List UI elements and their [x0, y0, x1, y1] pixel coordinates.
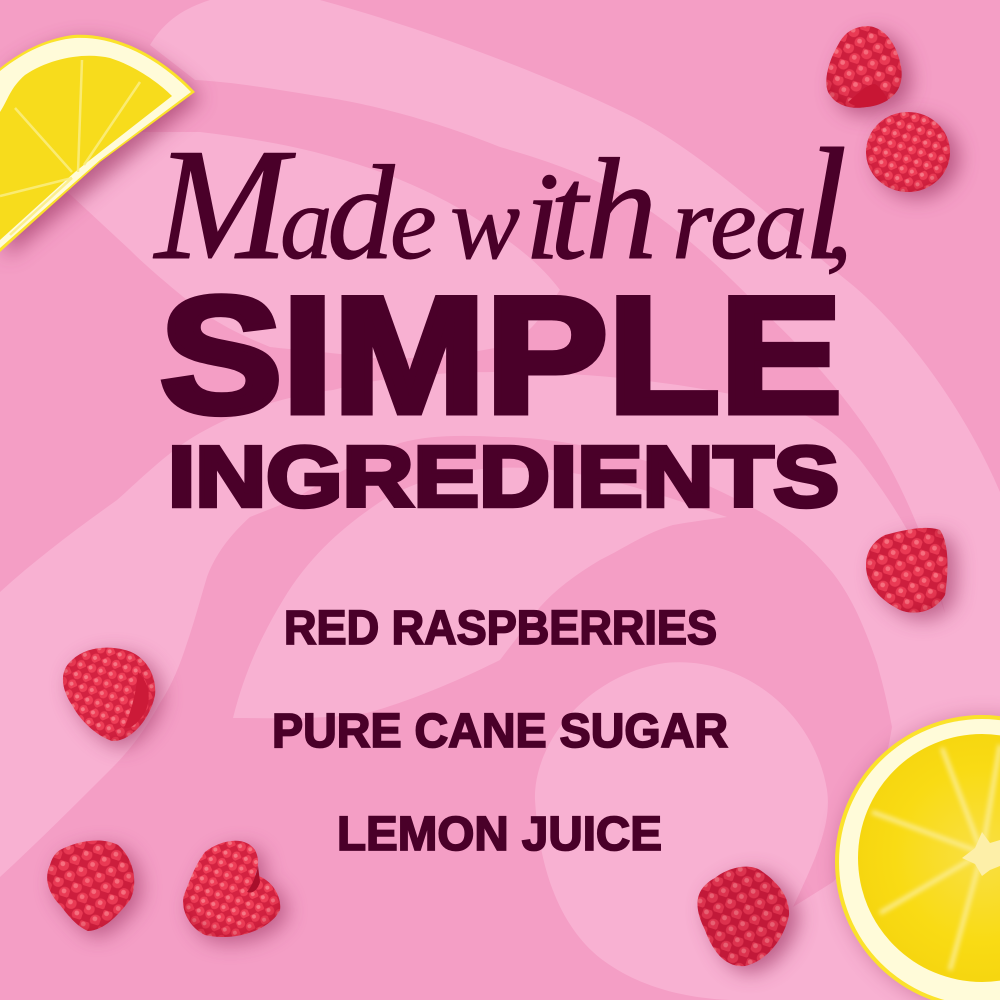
- swirl: inner leaf: [233, 468, 727, 718]
- heading: handwritten line: d: [327, 139, 395, 288]
- shading: raspberry 5: [47, 841, 134, 931]
- heading: handwritten line: r: [672, 164, 714, 281]
- rind: lemon slice: [835, 715, 1000, 1000]
- heading: handwritten line: ,: [826, 164, 852, 281]
- heading: handwritten line: h: [585, 130, 658, 290]
- shadow: raspberry 3: [875, 535, 956, 620]
- shading: raspberry 1: [826, 26, 902, 108]
- ingredient: lemon juice: LEMON JUICE: [337, 808, 662, 861]
- crease: raspberry 4: [124, 672, 149, 728]
- pith: lemon slice: [839, 719, 1000, 1000]
- rind: lemon wedge: [0, 35, 195, 252]
- swirl: large band from the left edge: [0, 372, 945, 877]
- shading: raspberry 7: [697, 867, 789, 966]
- shadow: raspberry 2: [875, 118, 959, 198]
- raspberry 1: [826, 26, 911, 115]
- ingredient: red raspberries: RED RASPBERRIES: [284, 602, 717, 655]
- raspberry 4: [63, 648, 162, 747]
- raspberry 2: [866, 112, 959, 198]
- heading: handwritten line: e: [390, 164, 437, 281]
- shading: raspberry 2: [866, 112, 950, 192]
- heading: handwritten line: t: [550, 139, 591, 288]
- membranes: lemon wedge: [0, 60, 140, 235]
- heading: handwritten line: l: [803, 115, 847, 293]
- pith: lemon wedge: [0, 38, 191, 248]
- crease: raspberry 1: [848, 84, 888, 107]
- ingredient: pure cane sugar: PURE CANE SUGAR: [272, 705, 728, 758]
- raspberry 3: [866, 528, 956, 620]
- shadow: lemon slice: [837, 716, 1000, 1000]
- raspberry 7: [697, 867, 798, 972]
- heading: INGREDIENTS: INGREDIENTS: [168, 430, 839, 525]
- shadow: raspberry 1: [835, 33, 911, 115]
- shading: raspberry 4: [63, 648, 155, 741]
- flesh: lemon slice: [858, 734, 1000, 982]
- heading: handwritten line: a: [755, 164, 808, 281]
- raspberry 6: [183, 841, 287, 943]
- lemon wedge top left: [0, 35, 201, 258]
- heading: SIMPLE: SIMPLE: [160, 263, 842, 447]
- heading: handwritten line: i: [525, 148, 560, 286]
- raspberry 5: [47, 841, 141, 937]
- shadow: raspberry 6: [190, 847, 287, 943]
- shadow: raspberry 7: [706, 873, 798, 972]
- berry: raspberry 4: [63, 648, 155, 741]
- shadow: raspberry 4: [70, 654, 162, 747]
- crease: raspberry 6: [247, 866, 260, 893]
- shading: raspberry 3: [866, 528, 947, 613]
- lemon slice bottom right: [835, 715, 1000, 1000]
- shadow: lemon wedge: [6, 41, 201, 258]
- berry: raspberry 7: [697, 867, 789, 966]
- heading: handwritten line: M: [153, 115, 296, 293]
- berry: raspberry 1: [826, 26, 902, 108]
- membranes: lemon slice: [872, 745, 1000, 970]
- berry: raspberry 6: [183, 841, 280, 937]
- heading: handwritten line: a: [280, 164, 332, 281]
- berry: raspberry 2: [866, 112, 950, 192]
- core: lemon slice: [962, 832, 1000, 876]
- heading: handwritten line: e: [710, 164, 757, 281]
- heading: handwritten line: w: [450, 164, 520, 281]
- flesh: lemon wedge: [0, 56, 172, 240]
- swirl: second leaf behind the headline: [60, 132, 560, 359]
- shadow: raspberry 5: [54, 847, 141, 937]
- berry: raspberry 3: [866, 528, 947, 613]
- berry: raspberry 5: [47, 841, 134, 931]
- shading: raspberry 6: [183, 841, 280, 937]
